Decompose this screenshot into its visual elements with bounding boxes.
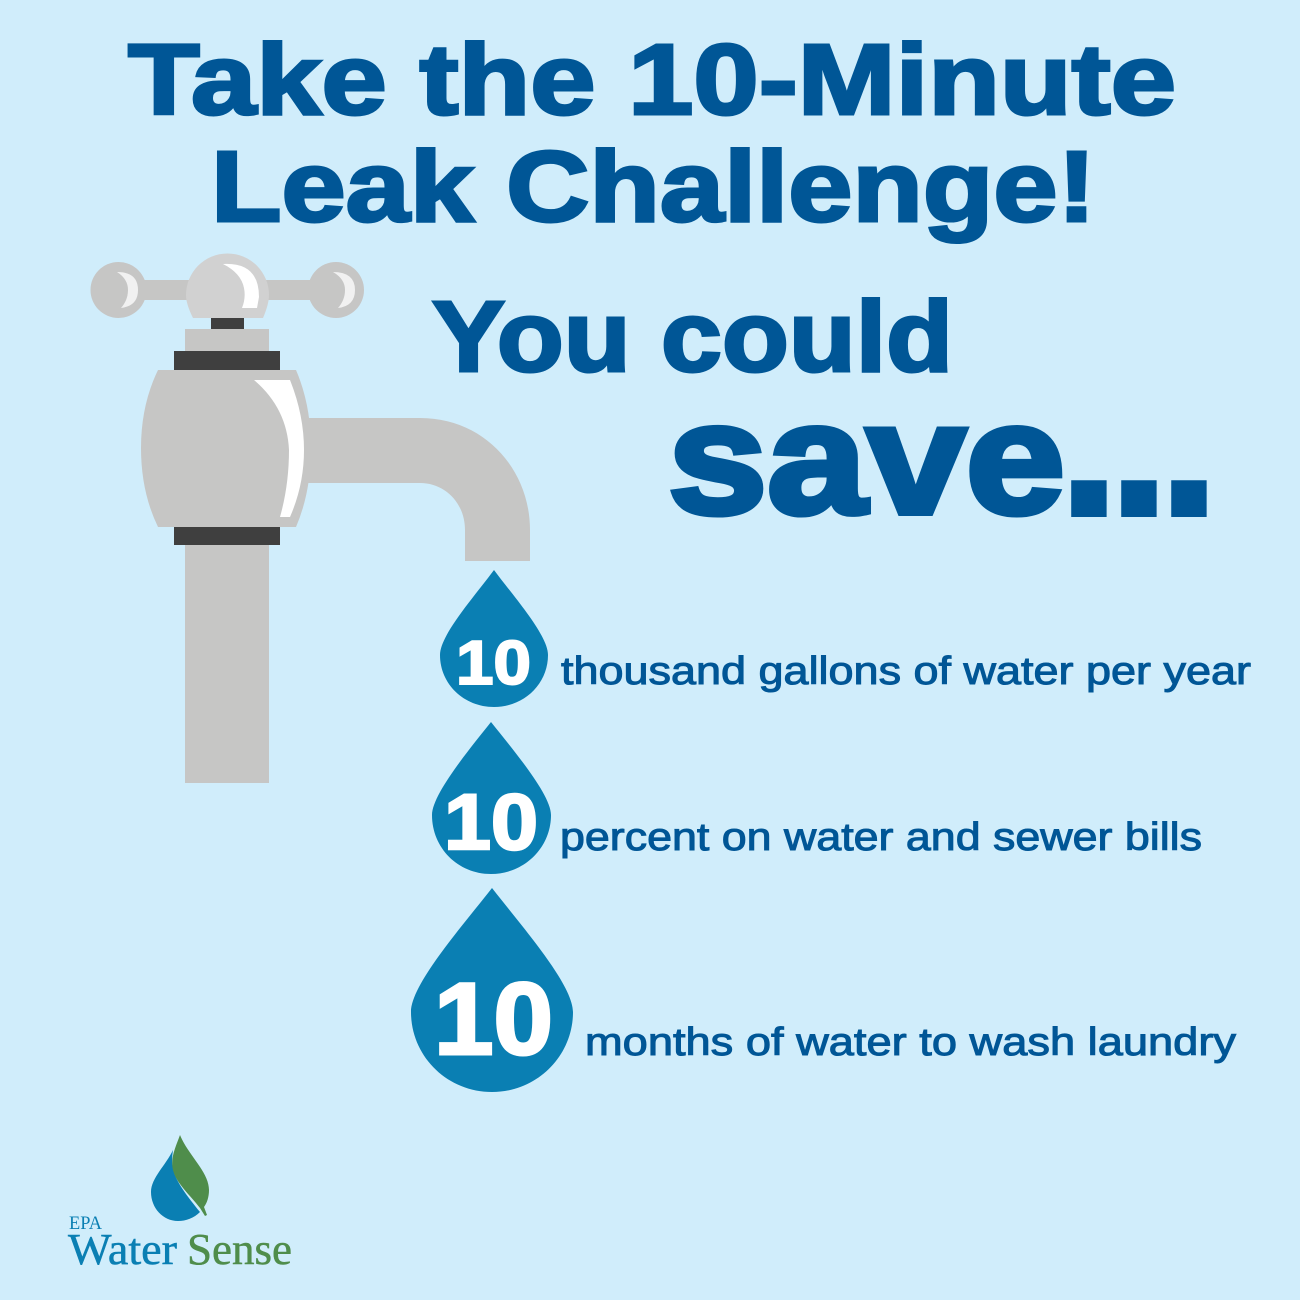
water drop 2 (432, 722, 551, 874)
heading: you could: You could (432, 281, 953, 393)
faucet knob (186, 253, 269, 318)
heading: save: save (668, 371, 1065, 547)
handle ball highlights (117, 272, 355, 308)
heading: save: ... (1064, 350, 1214, 551)
water drop 3 (411, 888, 573, 1092)
faucet collar (185, 329, 269, 351)
faucet handle bar (90, 262, 364, 318)
stat 1 text: thousand gallons of water per year (561, 650, 1251, 693)
faucet body (141, 370, 311, 527)
upper dark ring (174, 351, 280, 370)
lower dark ring (174, 527, 280, 545)
faucet neck (211, 318, 244, 329)
title: Leak Challenge! (211, 131, 1096, 243)
water drop 2: 10 (444, 777, 538, 866)
logo drop (151, 1150, 200, 1221)
heading: save (668, 350, 1214, 551)
stat 2 text: percent on water and sewer bills (560, 816, 1202, 859)
water drop 1: 10 (456, 629, 531, 698)
faucet pipe (185, 545, 269, 783)
title (128, 24, 1176, 243)
water drop 3: 10 (434, 962, 553, 1076)
logo: EPA WaterSense (68, 1135, 292, 1274)
logo EPA text: EPA (69, 1213, 102, 1234)
logo leaf (172, 1135, 209, 1216)
spout (300, 418, 530, 561)
icon: faucet (90, 253, 530, 783)
knob highlight (223, 264, 259, 308)
logo wordmark: Water (68, 1225, 177, 1274)
body highlight (254, 380, 304, 517)
logo wordmark: Sense (187, 1225, 292, 1274)
title: Take the 10-Minute (128, 24, 1176, 136)
water drop 1 (440, 570, 548, 707)
stat 3 text: months of water to wash laundry (585, 1021, 1237, 1064)
